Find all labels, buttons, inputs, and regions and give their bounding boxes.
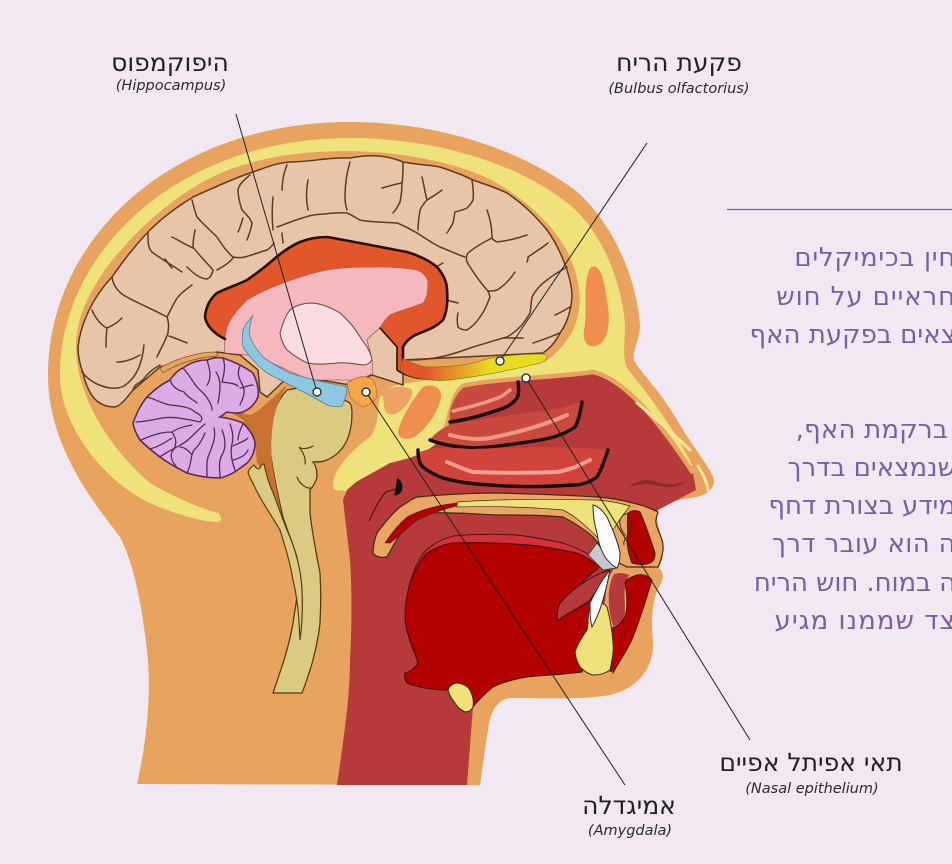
label: hippocampus: (Hippocampus) [116,78,226,94]
label: hippocampus [111,48,229,94]
label: hippocampus: היפוקמפוס [111,48,229,77]
leader line: nasal epithelium [526,378,750,740]
label: nasal epithelium [719,748,903,797]
paragraph two, clipped text: מידע בצורת דחף [768,491,952,521]
nostril shadow [629,480,687,487]
paragraph two, clipped text: צד שממנו מגיע [774,606,952,636]
nasal and pharynx tissue [337,372,696,785]
paragraph one, clipped text: חראיים על חוש [776,282,952,312]
pale inner region [280,303,372,365]
lower jaw bone [575,603,613,675]
middle turbinate [430,402,582,448]
brainstem and spinal cord [270,385,352,693]
nasal lining strip [440,372,693,473]
marker dot: amygdala [362,388,370,396]
cerebellum [133,358,258,478]
paragraph two, clipped text: שנמצאים בדרך [788,453,952,483]
paragraph two, clipped text: ה הוא עובר דרך [772,529,952,559]
head silhouette [48,122,714,785]
label: amygdala: (Amygdala) [588,823,672,839]
paragraph one, clipped text [750,243,952,350]
tentorium strip [160,352,218,373]
label: amygdala: אמיגדלה [582,791,676,820]
lower incisor [590,570,610,627]
hippocampus [242,315,347,407]
palate [373,493,663,567]
marker dot: hippocampus [313,388,321,396]
sphenoid sinus blobs [382,385,441,439]
tongue [405,543,600,707]
paragraph two, clipped text: ברקמת האף, [796,415,948,445]
label: olfactory bulb [608,48,750,97]
tongue tip flap [557,570,610,620]
oral roof strip [410,534,600,583]
Eustachian tube opening [369,478,402,521]
label: amygdala [582,791,676,839]
paragraph one, clipped text: חין בכימיקלים [794,243,952,273]
paragraph two, clipped text: ה במוח. חוש הריח [754,568,952,598]
marker dot: nasal epithelium [522,374,530,382]
label: nasal epithelium: (Nasal epithelium) [745,781,879,797]
corpus callosum [205,237,450,380]
label: nasal epithelium: תאי אפיתל אפיים [719,748,903,777]
lower lip and jaw tissue [607,572,652,673]
label: olfactory bulb: (Bulbus olfactorius) [608,81,750,97]
lower turbinate [418,447,608,486]
leader line: olfactory bulb [500,143,647,361]
pale nasal cartilage strips [637,403,708,490]
cerebellar tonsil strand [248,464,302,640]
divider rule [727,208,952,210]
leader line: amygdala [366,392,625,785]
amygdala [347,377,377,407]
skull bone yellow band [60,138,692,522]
paragraph one, clipped text: צאים בפקעת האף [750,320,952,350]
hyoid bone [448,683,473,712]
leader line: hippocampus [236,114,317,392]
upper turbinate [450,382,519,422]
frontal sinus [584,267,609,346]
thalamus pink region [225,267,428,380]
teeth grey gum [588,543,617,570]
brain cerebrum [78,156,572,407]
label: olfactory bulb: פקעת הריח [616,48,742,77]
olfactory bulb [400,354,547,380]
fourth ventricle [227,385,287,520]
upper incisor [593,505,620,568]
paragraph two, clipped text [754,415,952,636]
floor of nose upper lip [620,511,655,564]
marker dot: olfactory bulb [496,357,504,365]
